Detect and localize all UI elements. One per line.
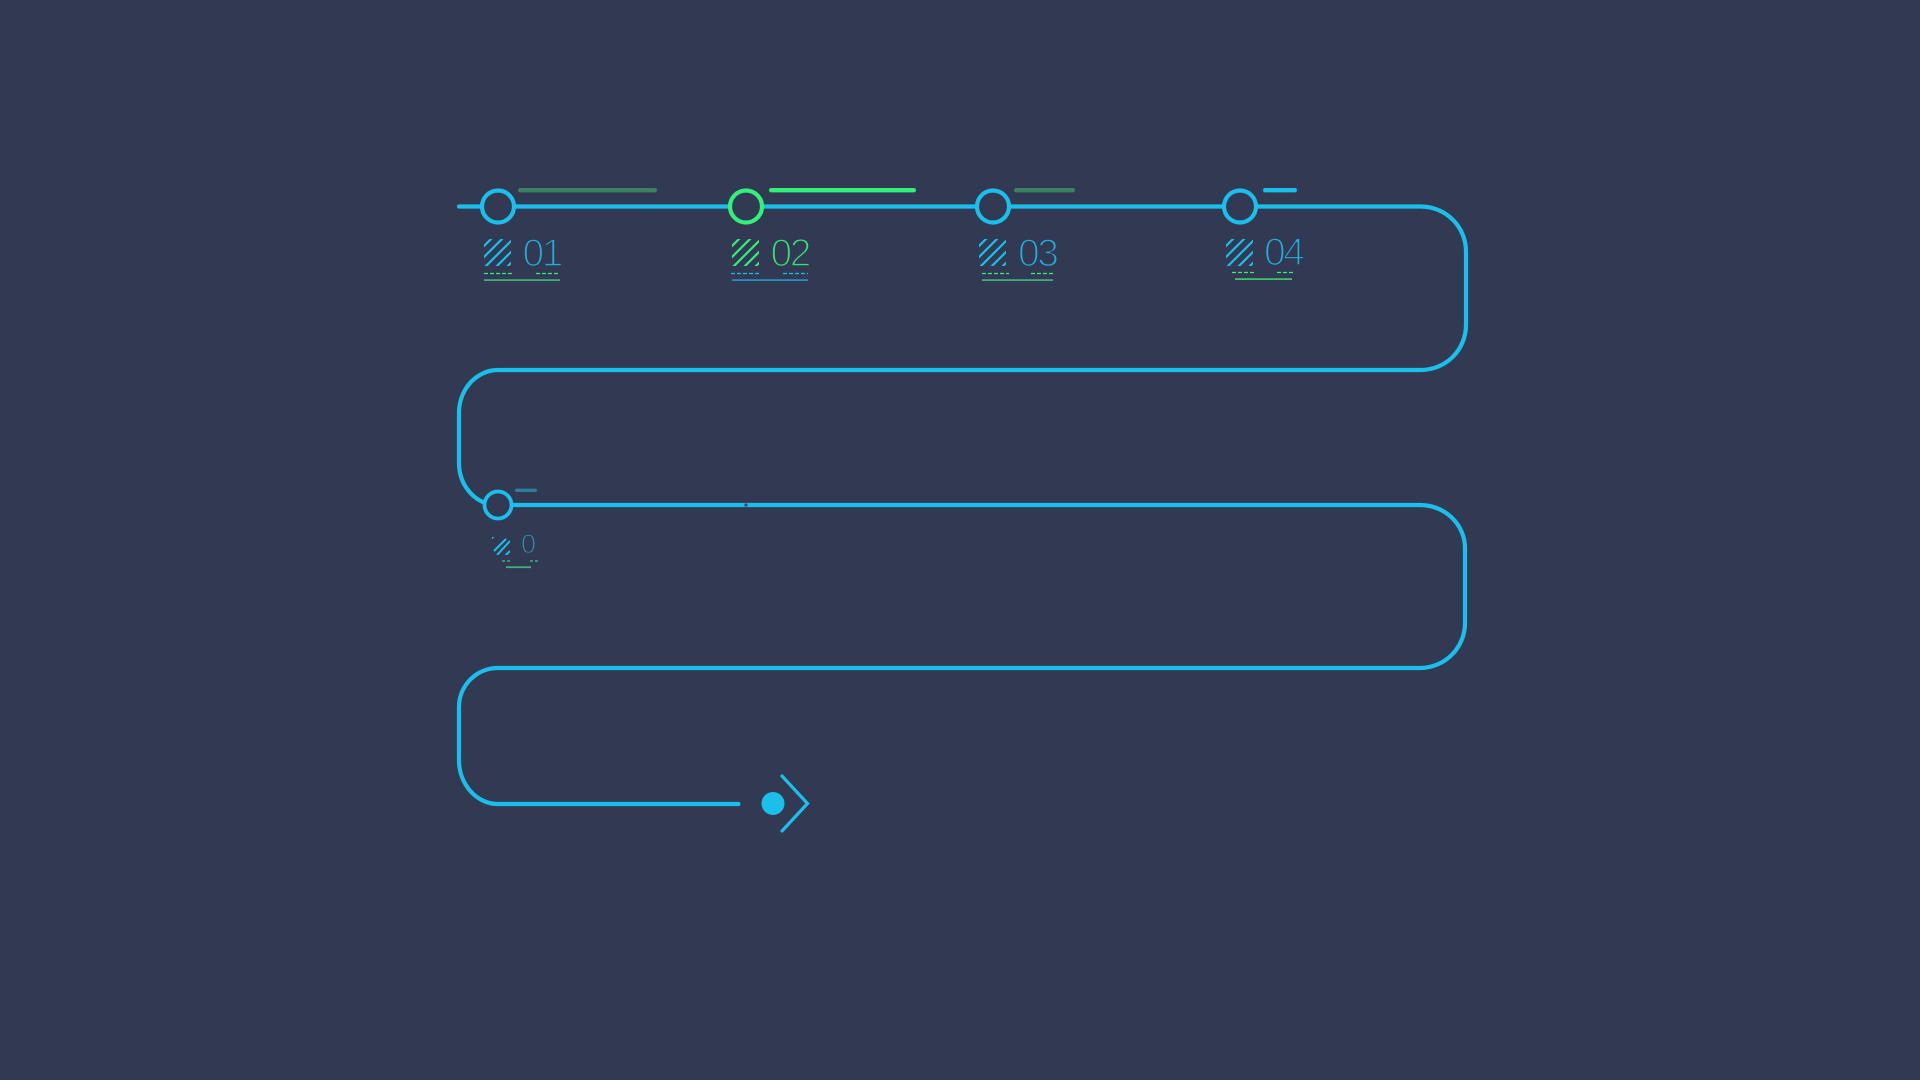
- node circle 05: [484, 492, 512, 518]
- number 01: 01: [522, 232, 564, 275]
- progress bar 02: [769, 188, 916, 192]
- node circle 02: [730, 190, 762, 222]
- number 0: 0: [521, 529, 536, 559]
- hatch icon 02: [732, 239, 759, 266]
- number 03: 03: [1018, 232, 1059, 275]
- end dot: [762, 792, 784, 815]
- underline 01: [484, 274, 560, 281]
- small travelling dot: [744, 503, 748, 507]
- hatch icon 05: [492, 537, 510, 555]
- end marker: [762, 776, 808, 831]
- progress bar 05: [515, 489, 537, 492]
- underline 02: [731, 274, 808, 281]
- number 04: 04: [1264, 231, 1305, 274]
- node circle 01: [482, 190, 514, 222]
- underline 03: [982, 274, 1055, 281]
- node circle 04: [1224, 190, 1256, 222]
- winding path line: [459, 206, 1466, 804]
- node circle 03: [977, 190, 1009, 222]
- hatch icon 04: [1226, 239, 1253, 266]
- arrow chevron: [782, 776, 808, 831]
- progress bar 01: [518, 188, 657, 192]
- step 02: [728, 188, 916, 281]
- step 01: [480, 188, 657, 281]
- progress bar 04: [1263, 188, 1297, 192]
- underline 05: [502, 561, 539, 568]
- hatch icon 01: [484, 239, 511, 266]
- hatch icon 03: [979, 239, 1006, 266]
- progress bar 03: [1014, 188, 1075, 192]
- number 02: 02: [770, 232, 812, 275]
- underline 04: [1232, 272, 1295, 280]
- step 03: [975, 188, 1075, 281]
- step 05: [484, 489, 748, 568]
- step 04: [1222, 188, 1303, 280]
